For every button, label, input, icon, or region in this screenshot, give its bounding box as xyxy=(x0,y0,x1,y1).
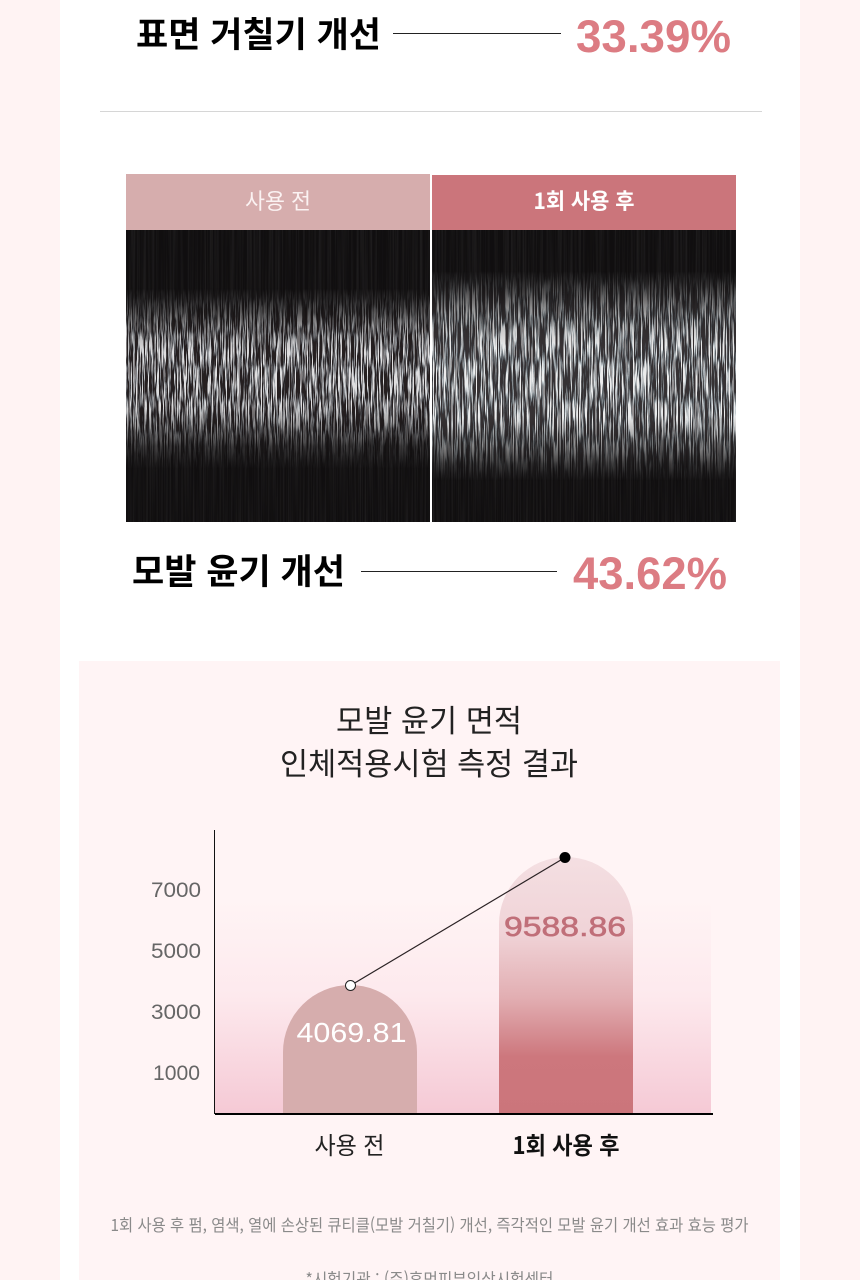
bar chart xyxy=(151,830,713,1161)
result row: surface roughness improvement xyxy=(136,7,731,62)
y axis labels xyxy=(151,879,201,1085)
y axis labels: 7000 xyxy=(151,879,201,902)
comparison panel: after photo xyxy=(432,175,736,522)
axes xyxy=(214,830,713,1114)
heading: surface roughness: 표면 거칠기 개선 xyxy=(136,7,381,58)
hair photo: after xyxy=(432,230,736,522)
chart title: 인체적용시험 측정 결과 xyxy=(280,739,578,784)
footnote: evaluation description: 1회 사용 후 펌, 염색, 열에 손상된 큐티클(모발 거칠기) 개선, 즉각적인 모발 윤기 개선 효과 효능 평가 xyxy=(110,1212,748,1236)
y axis labels: 5000 xyxy=(151,940,201,963)
chart title xyxy=(280,696,578,784)
x label: before: 사용 전 xyxy=(314,1126,384,1161)
value: before: 4069.81 xyxy=(296,1017,406,1048)
result row: hair shine improvement xyxy=(132,544,727,599)
point: after xyxy=(560,852,570,863)
y axis labels: 1000 xyxy=(153,1062,200,1085)
trend line xyxy=(350,858,565,986)
header label: after: 1회 사용 후 xyxy=(534,184,634,216)
value: after: 9588.86 xyxy=(504,911,626,942)
x label: after: 1회 사용 후 xyxy=(512,1126,620,1161)
bar: after xyxy=(499,857,633,1113)
chart title: 모발 윤기 면적 xyxy=(336,696,522,741)
percentage: 43.62%: 43.62% xyxy=(573,548,727,599)
connector line xyxy=(393,32,561,34)
heading: hair shine: 모발 윤기 개선 xyxy=(132,544,345,595)
connector line xyxy=(361,570,557,572)
bar: before xyxy=(283,985,417,1113)
percentage: 33.39%: 33.39% xyxy=(576,11,731,62)
header label: before: 사용 전 xyxy=(245,184,311,216)
header: before xyxy=(126,174,430,230)
point: before xyxy=(346,980,356,990)
y axis labels: 3000 xyxy=(151,1001,201,1024)
panel: clinical test result xyxy=(79,661,780,1280)
comparison panel: before photo xyxy=(126,174,430,522)
hair photo: before xyxy=(126,230,430,522)
header: after xyxy=(432,175,736,230)
